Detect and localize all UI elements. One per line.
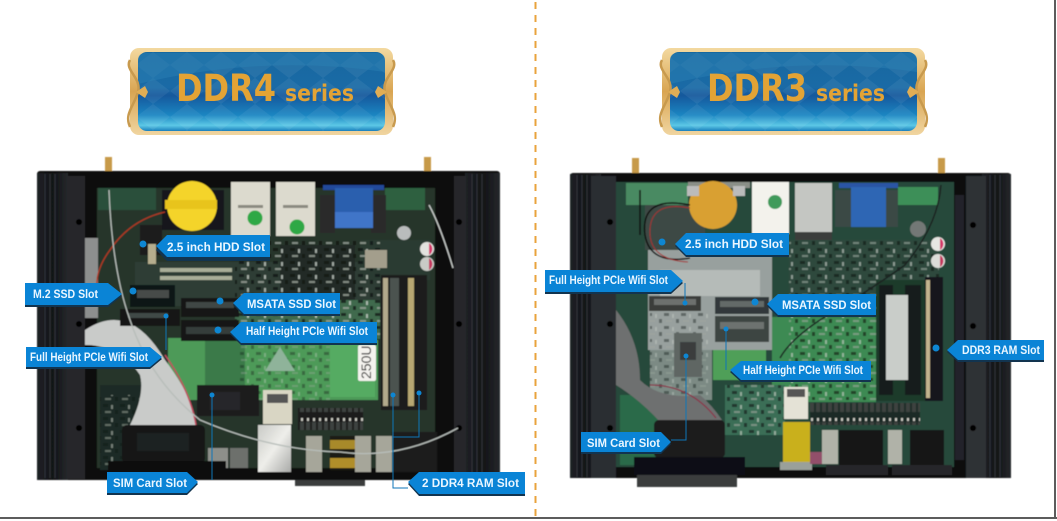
RJ45 ports xyxy=(752,182,789,234)
pin header xyxy=(810,403,920,425)
capacitors xyxy=(910,221,926,237)
callout: M.2 SSD Slot xyxy=(25,283,122,307)
capacitors xyxy=(397,226,411,240)
ribbon cable xyxy=(85,320,196,425)
callout dots xyxy=(658,238,940,358)
RAM slot xyxy=(381,275,427,410)
callout: SIM Card Slot (DDR3) xyxy=(581,432,671,454)
callout: MSATA SSD Slot (DDR4): MSATA SSD Slot xyxy=(247,297,336,311)
callout: Half Height PCIe Wifi Slot (DDR3) xyxy=(730,361,871,382)
callout dots xyxy=(130,240,422,398)
callout: MSATA SSD Slot (DDR4) xyxy=(233,293,340,316)
callout: MSATA SSD Slot (DDR3): MSATA SSD Slot xyxy=(782,298,871,312)
chassis xyxy=(570,173,1011,478)
callout: 2.5 inch HDD Slot (DDR3) xyxy=(675,233,789,257)
board xyxy=(97,188,435,468)
leader lines xyxy=(166,316,419,488)
callout: SIM Card Slot (DDR4) xyxy=(107,472,198,495)
panel: DDR4 mini PC photo: 250U xyxy=(358,346,374,379)
USB and metal xyxy=(263,390,292,424)
ports xyxy=(306,436,322,472)
label 250U xyxy=(358,345,376,381)
RJ45 ports xyxy=(231,182,270,236)
pin header xyxy=(298,408,363,430)
callout: M.2 SSD Slot: M.2 SSD Slot xyxy=(33,287,98,301)
VGA xyxy=(323,185,384,190)
ports xyxy=(822,430,838,464)
triangle mark xyxy=(265,347,295,371)
callout: 2 DDR4 RAM Slot: 2 DDR4 RAM Slot xyxy=(422,476,519,490)
callout: SIM Card Slot (DDR3): SIM Card Slot xyxy=(587,436,660,450)
callout: Half Height PCIe Wifi Slot (DDR3): Half Height PCIe Wifi Slot xyxy=(743,363,863,377)
VGA xyxy=(839,183,898,188)
mini PCIe slots xyxy=(649,296,701,311)
callout: Half Height PCIe Wifi Slot (DDR4) xyxy=(230,322,377,345)
battery xyxy=(162,190,224,230)
antennas xyxy=(632,158,639,175)
mini PCIe slots xyxy=(130,285,175,307)
D-sub connector xyxy=(122,425,205,463)
SIM slot xyxy=(674,333,702,377)
callout: Full Height PCIe Wifi Slot (DDR3): Full Height PCIe Wifi Slot xyxy=(549,273,668,287)
banner title: DDR4: DDR4 xyxy=(176,67,276,110)
callout: MSATA SSD Slot (DDR3) xyxy=(767,294,876,317)
RAM module xyxy=(876,280,925,401)
DDR4 series banner xyxy=(128,48,395,135)
callout: Half Height PCIe Wifi Slot (DDR4): Half Height PCIe Wifi Slot xyxy=(246,324,368,338)
USB and tape xyxy=(784,387,808,419)
banner title: DDR3: DDR3 xyxy=(707,67,807,110)
grey antenna wires xyxy=(109,190,458,454)
callout: DDR3 RAM Slot xyxy=(947,340,1044,362)
battery xyxy=(688,182,750,188)
antennas xyxy=(105,157,112,175)
banner subtitle: series: series xyxy=(816,81,885,107)
panel: DDR4 mini PC photo xyxy=(37,157,500,488)
ribbon cable xyxy=(616,310,722,422)
callout: Full Height PCIe Wifi Slot (DDR4): Full Height PCIe Wifi Slot xyxy=(30,350,148,364)
callout: 2.5 inch HDD Slot (DDR3): 2.5 inch HDD Slot xyxy=(685,237,783,251)
red wire xyxy=(97,212,165,290)
callout: Full Height PCIe Wifi Slot (DDR4) xyxy=(26,347,162,369)
banner subtitle: series: series xyxy=(285,81,354,107)
wires xyxy=(640,190,690,259)
callout: 2.5 inch HDD Slot (DDR4): 2.5 inch HDD Slot xyxy=(167,240,265,254)
SIM slot xyxy=(197,385,259,416)
DDR3 series banner xyxy=(660,48,927,135)
callout: DDR3 RAM Slot: DDR3 RAM Slot xyxy=(962,343,1040,357)
leader lines xyxy=(671,283,726,440)
callout: SIM Card Slot (DDR4): SIM Card Slot xyxy=(113,476,187,490)
center divider: dashed line xyxy=(534,2,536,517)
silver shield xyxy=(648,250,772,350)
callout: 2 DDR4 RAM Slot xyxy=(408,472,525,496)
chassis xyxy=(37,171,500,480)
panel: DDR3 mini PC photo xyxy=(570,158,1011,487)
callout: 2.5 inch HDD Slot (DDR4) xyxy=(156,235,270,261)
D-sub connector xyxy=(654,420,725,458)
callout: Full Height PCIe Wifi Slot (DDR3) xyxy=(545,270,683,294)
board xyxy=(616,182,954,467)
